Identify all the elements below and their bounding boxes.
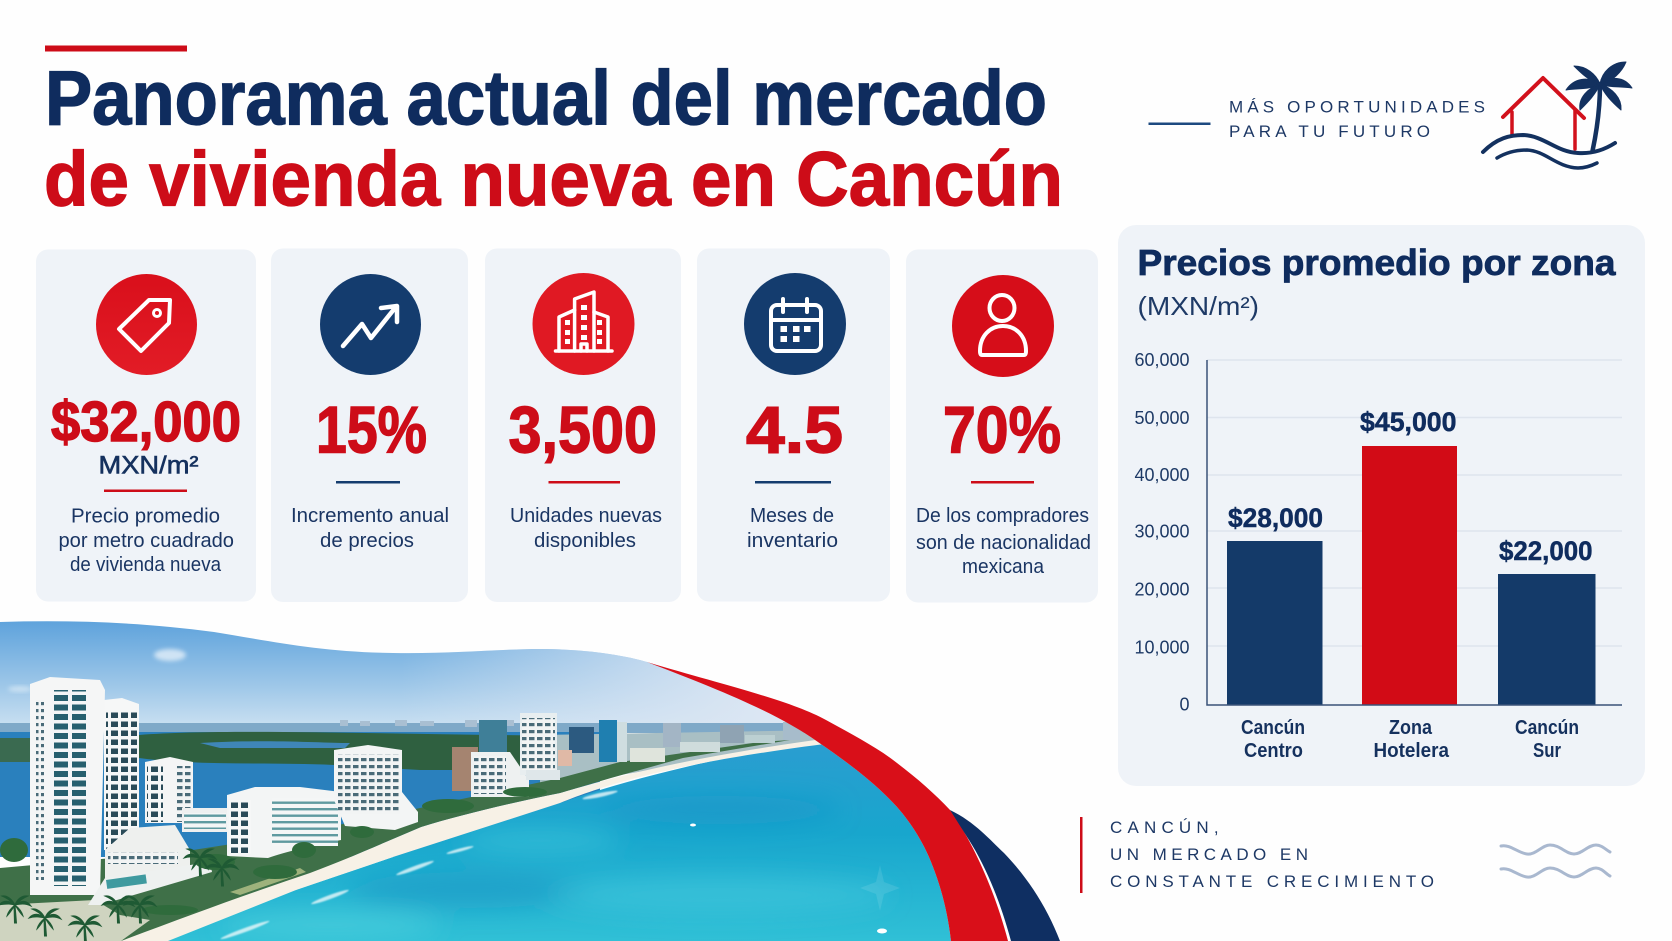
card: compradores bbox=[906, 250, 1098, 602]
value: 70%: 70% bbox=[943, 392, 1061, 466]
y axis labels: 10,000 bbox=[1134, 638, 1190, 658]
panel: KPI cards bbox=[36, 248, 1098, 602]
value: 3,500: 3,500 bbox=[508, 392, 657, 466]
title: de vivienda nueva en Cancún bbox=[44, 136, 1063, 222]
description: Unidades nuevas bbox=[510, 505, 662, 527]
y axis labels bbox=[1134, 350, 1190, 714]
chart heading: Precios promedio por zona bbox=[1138, 242, 1616, 283]
description: Meses de bbox=[750, 505, 834, 527]
panel: price chart bbox=[1118, 225, 1645, 786]
y axis labels: 60,000 bbox=[1134, 350, 1190, 370]
bar: Cancún Sur: Sur bbox=[1533, 740, 1561, 762]
small boats and sparkle bbox=[690, 824, 900, 934]
description: de precios bbox=[320, 530, 414, 552]
bar: Cancún Centro bbox=[1227, 503, 1323, 762]
tagline: Cancún mercado: CONSTANTE CRECIMIENTO bbox=[1110, 872, 1434, 891]
bar: Cancún Sur: $22,000 bbox=[1499, 536, 1592, 566]
value: 15%: 15% bbox=[316, 392, 427, 466]
photo: Cancún hotel zone coastline bbox=[0, 615, 1000, 941]
card: precio promedio bbox=[36, 250, 256, 602]
y axis labels: 0 bbox=[1179, 694, 1190, 714]
description: inventario bbox=[747, 530, 838, 552]
description bbox=[916, 505, 1091, 578]
bar: Cancún Sur bbox=[1498, 536, 1596, 762]
card: meses de inventario bbox=[697, 248, 890, 602]
bar: Cancún Centro: Centro bbox=[1244, 740, 1303, 762]
card: unidades nuevas bbox=[485, 248, 681, 602]
tagline: Cancún mercado: UN MERCADO EN bbox=[1110, 845, 1308, 864]
description: mexicana bbox=[962, 556, 1045, 578]
icon: trend arrow bbox=[320, 274, 421, 375]
skyscraper towers bbox=[30, 677, 228, 905]
beach bbox=[121, 738, 832, 941]
tagline: más oportunidades bbox=[1148, 98, 1485, 141]
tagline: más oportunidades: PARA TU FUTURO bbox=[1229, 122, 1430, 141]
description: son de nacionalidad bbox=[916, 532, 1091, 554]
title bbox=[44, 56, 1063, 222]
chart unit: (MXN/m²) bbox=[1138, 291, 1259, 321]
value: $32,000: $32,000 bbox=[51, 390, 241, 454]
description bbox=[510, 505, 662, 552]
title: Panorama actual del mercado bbox=[45, 56, 1047, 142]
description: Precio promedio bbox=[71, 506, 220, 528]
description: de vivienda nueva bbox=[70, 554, 222, 576]
bar: Cancún Centro: $28,000 bbox=[1228, 503, 1323, 533]
unit: MXN/m²: MXN/m² bbox=[98, 452, 198, 480]
description: Incremento anual bbox=[291, 505, 449, 527]
card: incremento anual bbox=[271, 248, 468, 602]
tagline: Cancún mercado bbox=[1080, 817, 1434, 893]
bar: Zona Hotelera bbox=[1360, 407, 1457, 762]
y axis labels: 40,000 bbox=[1134, 465, 1190, 485]
bar: Cancún Centro: Cancún bbox=[1241, 717, 1305, 739]
tagline: Cancún mercado: CANCÚN, bbox=[1110, 818, 1219, 837]
y axis labels: 20,000 bbox=[1134, 580, 1190, 600]
distant towers bbox=[452, 713, 800, 797]
bar: Zona Hotelera: $45,000 bbox=[1360, 407, 1456, 437]
description bbox=[291, 505, 449, 552]
title accent bar bbox=[45, 46, 187, 52]
bar: Zona Hotelera: Zona bbox=[1389, 717, 1433, 739]
navy swoosh bbox=[950, 810, 1060, 941]
description: por metro cuadrado bbox=[58, 530, 234, 552]
tagline: más oportunidades: MÁS OPORTUNIDADES bbox=[1229, 98, 1485, 117]
red swoosh bbox=[647, 662, 1008, 941]
bar: Zona Hotelera: Hotelera bbox=[1374, 740, 1450, 762]
palm trees and foliage bbox=[0, 787, 547, 941]
shoreline vegetation and grounds bbox=[0, 740, 790, 941]
lagoon and distant land bbox=[0, 723, 840, 733]
icon: person bbox=[952, 275, 1054, 377]
icon: calendar bbox=[744, 273, 846, 375]
y axis labels: 30,000 bbox=[1134, 522, 1190, 542]
icon: decorative waves bbox=[1501, 845, 1610, 877]
description bbox=[747, 505, 838, 552]
hotel blocks bbox=[227, 745, 418, 858]
icon: price tag bbox=[96, 274, 197, 375]
value: 4.5: 4.5 bbox=[746, 392, 843, 466]
icon: house, palm and waves logo bbox=[1483, 62, 1632, 168]
sea bbox=[150, 740, 1000, 941]
description bbox=[58, 506, 234, 576]
icon: buildings bbox=[532, 273, 634, 375]
y axis labels: 50,000 bbox=[1134, 408, 1190, 428]
description: De los compradores bbox=[916, 505, 1089, 527]
description: disponibles bbox=[534, 530, 636, 552]
bar: Cancún Sur: Cancún bbox=[1515, 717, 1579, 739]
